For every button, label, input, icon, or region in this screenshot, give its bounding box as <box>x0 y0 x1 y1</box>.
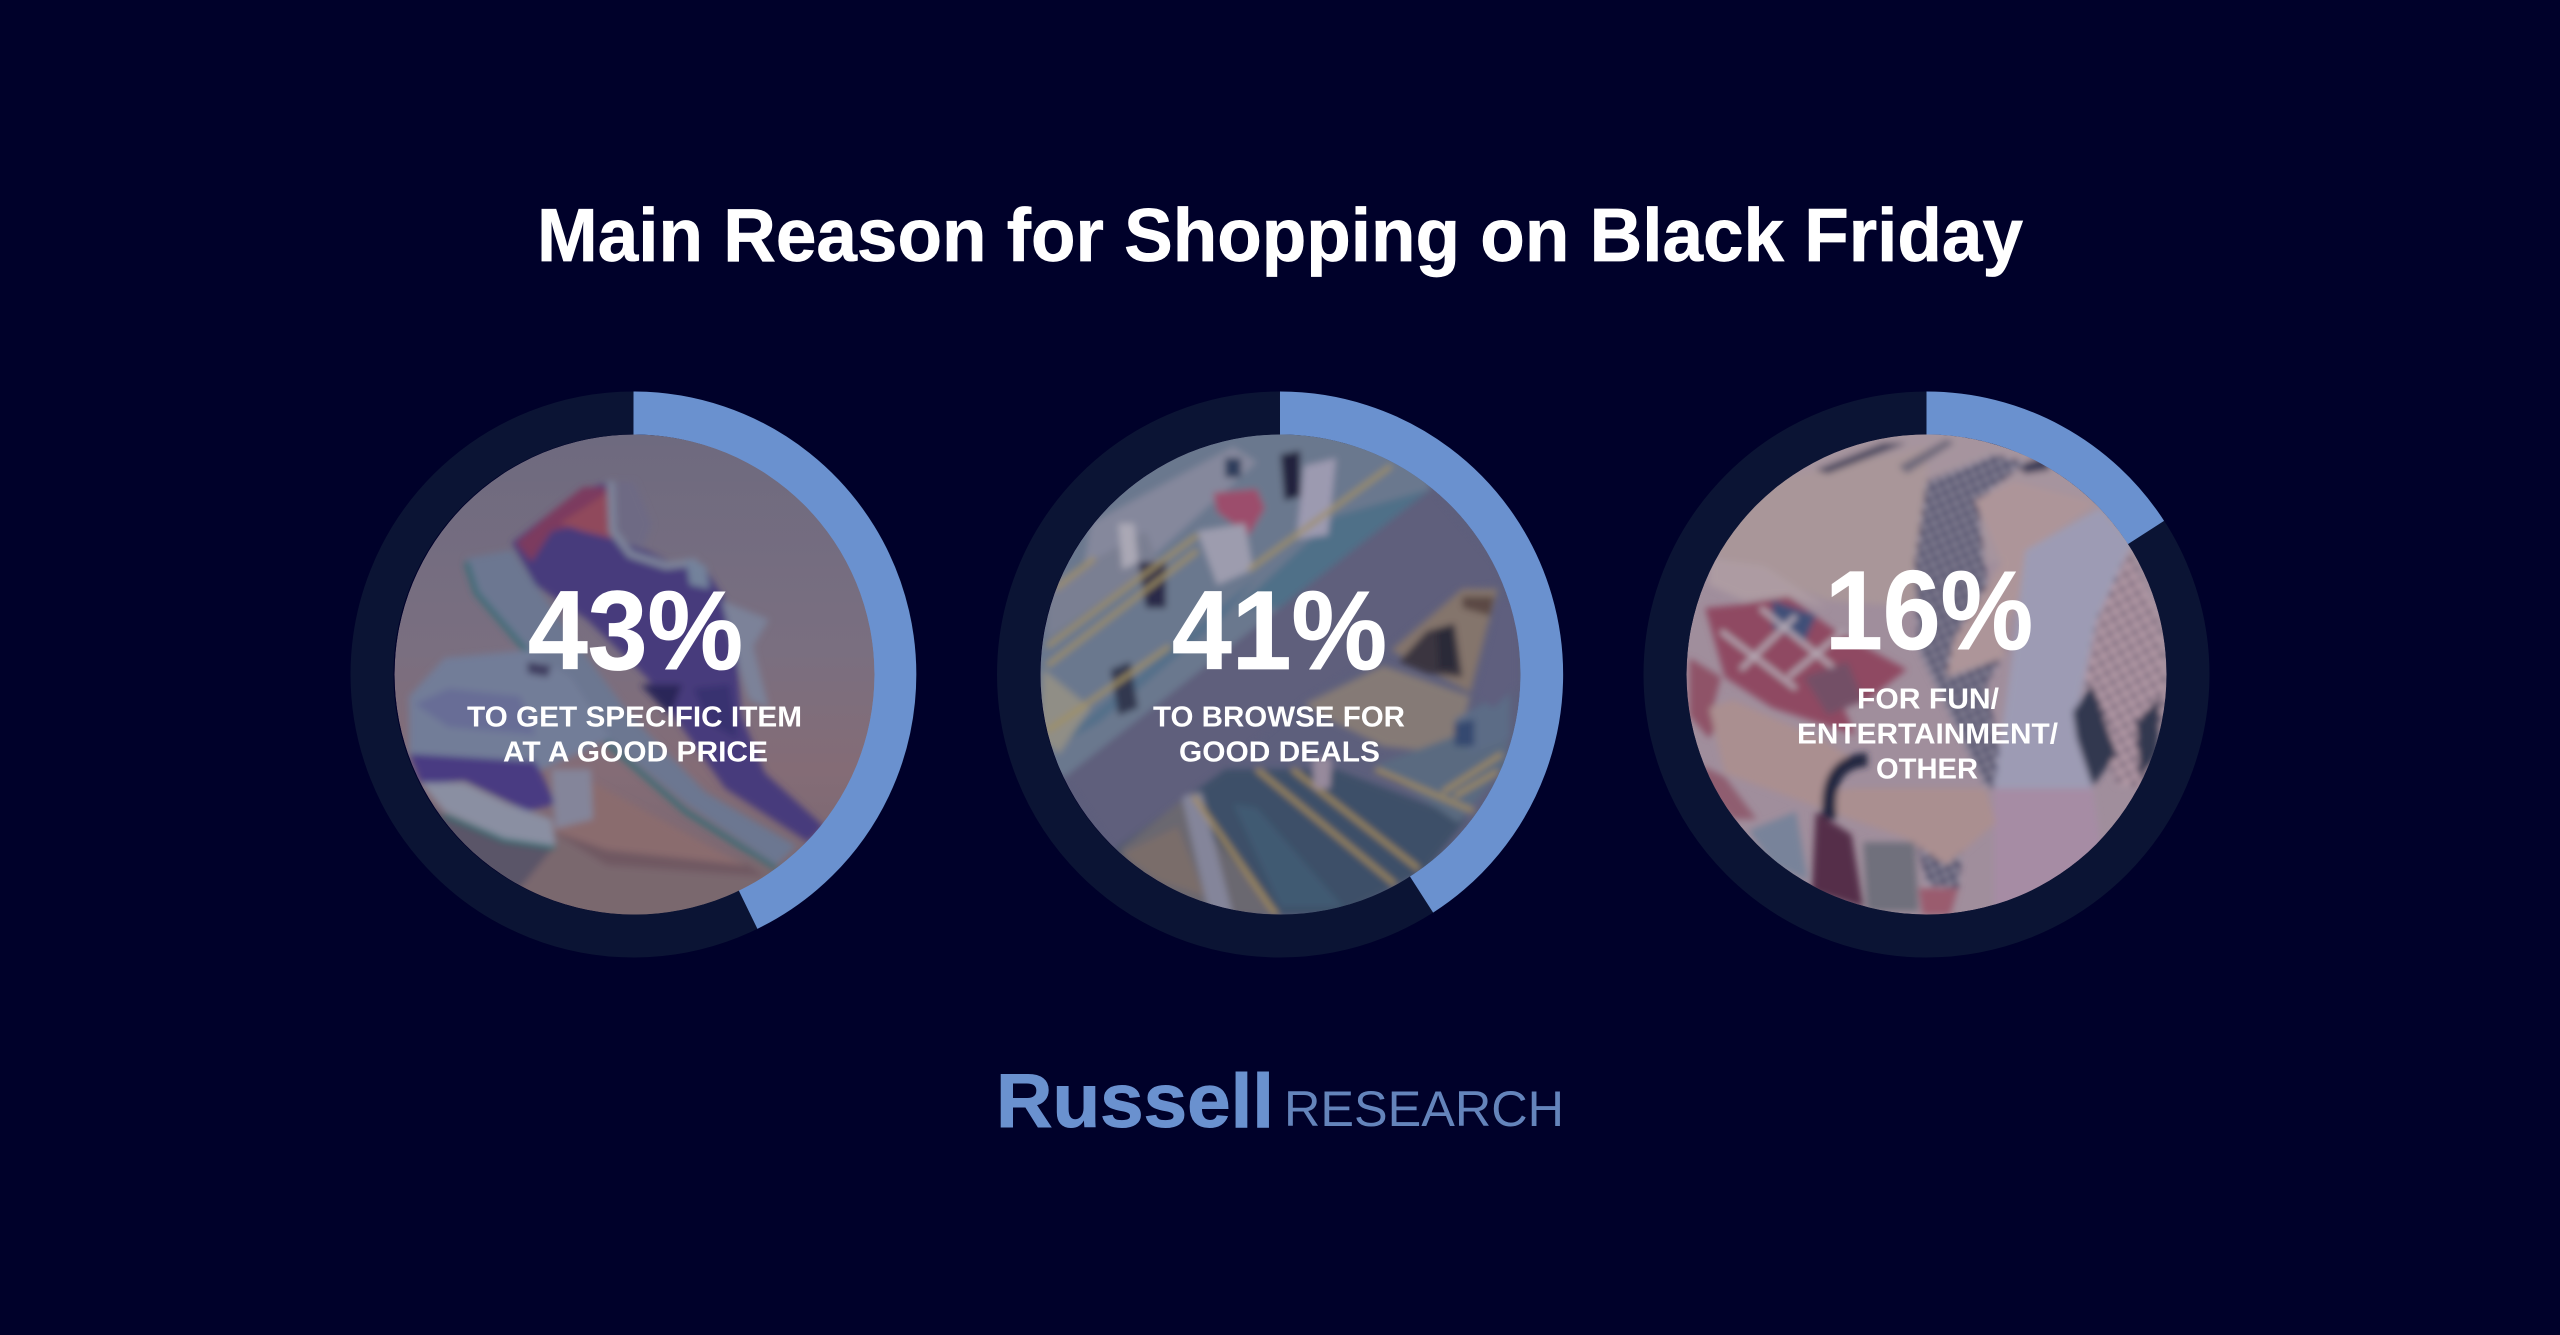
crowd area <box>1040 434 1430 780</box>
value: 16%: 16% <box>1825 548 2033 673</box>
diagonal balustrade <box>1066 548 1502 850</box>
label: to browse for good deals <box>1153 702 1405 768</box>
white-blue shirt <box>1992 509 2130 791</box>
label: to browse for good deals: TO BROWSE FOR <box>1153 702 1405 734</box>
donut value arc 41% <box>1280 413 1542 894</box>
donut track <box>1018 413 1542 936</box>
donut value arc 43% <box>634 413 895 910</box>
title: Main Reason for Shopping on Black Friday <box>537 193 2023 277</box>
photo: clothing rack <box>1686 428 2184 915</box>
value: 43%: 43% <box>528 568 743 693</box>
laces <box>721 600 769 708</box>
label: for fun, entertainment, other: ENTERTAINMENT/ <box>1797 718 2058 750</box>
lower escalators <box>1114 769 1466 915</box>
label: for fun, entertainment, other: OTHER <box>1876 754 1978 786</box>
label: for fun, entertainment, other: FOR FUN/ <box>1857 684 1999 716</box>
panel: 43 percent specific item <box>372 413 895 936</box>
label: to get specific item at a good price: AT A GOOD PRICE <box>503 736 768 768</box>
floor <box>1304 666 1470 754</box>
panel: 41 percent browse for deals <box>1018 408 1542 936</box>
shoe 1 upper <box>512 481 824 842</box>
donut value arc 16% <box>1926 413 2146 532</box>
label: to get specific item at a good price: TO GET SPECIFIC ITEM <box>467 702 802 734</box>
logo: Russell Research <box>996 1059 1564 1144</box>
logo: Russell Research: RESEARCH <box>1284 1081 1564 1137</box>
label: to browse for good deals: GOOD DEALS <box>1179 736 1380 768</box>
left hand <box>1706 558 1812 604</box>
value: 41%: 41% <box>1172 568 1387 693</box>
label: for fun, entertainment, other <box>1797 684 2058 786</box>
label: to get specific item at a good price <box>467 702 802 768</box>
right polka-dot garment <box>2085 550 2168 788</box>
logo: Russell Research: Russell <box>996 1059 1274 1144</box>
dark polka-dot garment <box>1915 454 2025 788</box>
forearm <box>1943 494 2022 680</box>
arm and hands <box>1709 700 1996 865</box>
donut track <box>372 413 895 936</box>
plaid shirt <box>1705 597 1907 735</box>
sole of front shoe <box>466 550 797 865</box>
panel: 16 percent fun entertainment other <box>1665 413 2188 936</box>
back shoe <box>409 650 611 769</box>
bracelet <box>1829 760 1867 819</box>
right shop window <box>1391 589 1498 692</box>
photo: sneakers <box>389 434 874 927</box>
photo: mall escalators <box>1020 408 1520 915</box>
donut track <box>1665 413 2188 936</box>
